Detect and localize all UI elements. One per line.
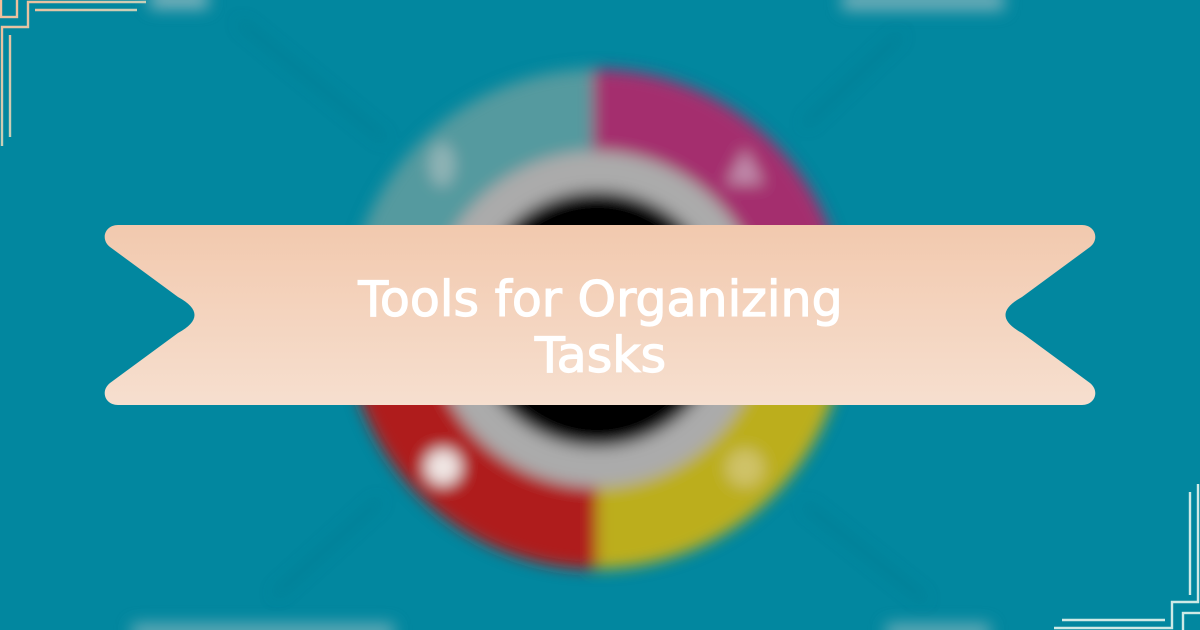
title: Tasks [535, 327, 666, 384]
wheel segment: teal [356, 60, 604, 225]
wheel segment: magenta [580, 58, 840, 225]
icon: red segment [425, 449, 461, 485]
bottom-right corner ornament [1054, 484, 1200, 630]
wheel segment: yellow [582, 405, 844, 581]
icon: magenta segment [726, 148, 764, 184]
title: Tools for Organizing [358, 271, 843, 328]
icon: yellow segment [726, 449, 764, 487]
label: top left [150, 0, 208, 8]
label: bottom right [886, 624, 990, 630]
icon: teal segment [429, 143, 455, 187]
wheel gray ring [428, 151, 764, 487]
wheel segment: red [350, 405, 609, 580]
title [358, 271, 843, 384]
label: bottom left [132, 624, 394, 630]
blurred corner labels [132, 0, 1004, 630]
top-left corner ornament [1, 0, 146, 146]
ribbon banner [105, 225, 1095, 405]
wheel black centre [469, 191, 725, 447]
connector lines [240, 22, 925, 600]
label: top right [842, 0, 1004, 10]
